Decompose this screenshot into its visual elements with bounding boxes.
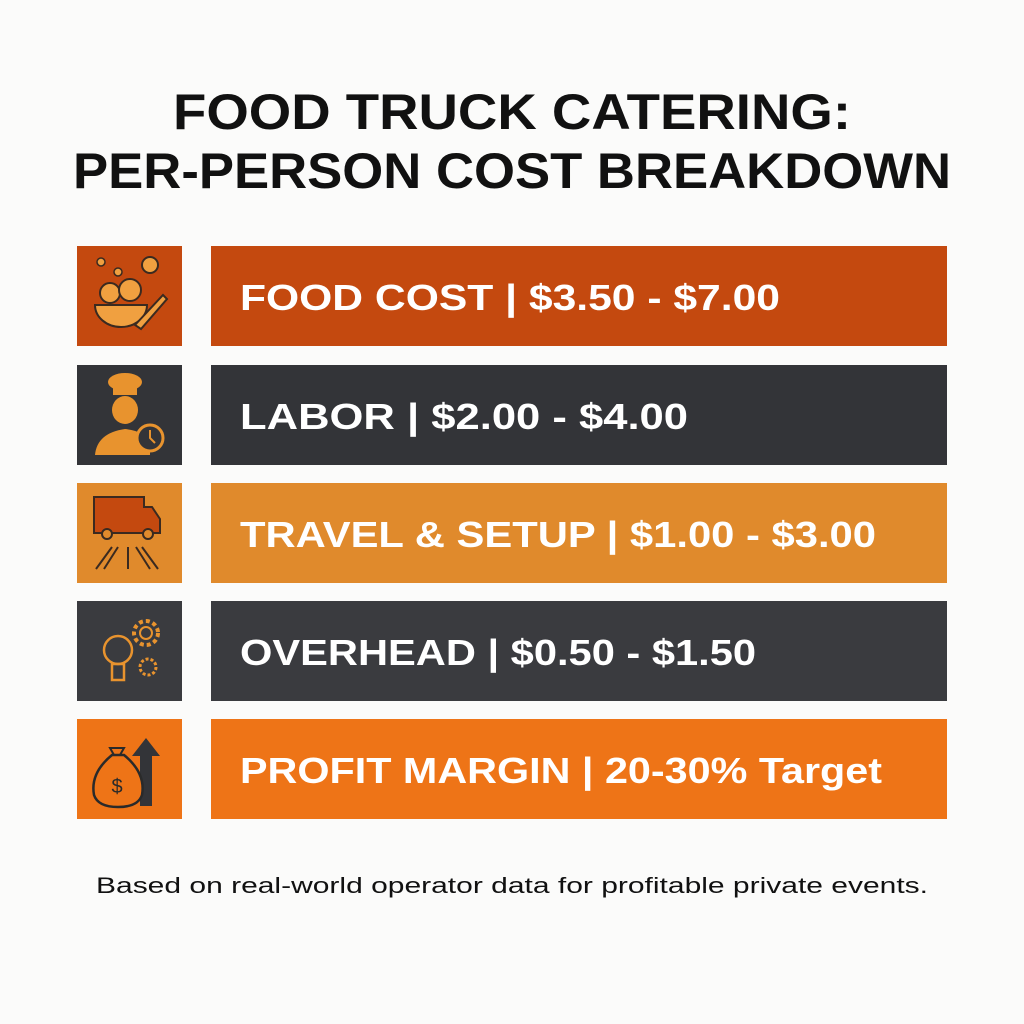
bar: labor: LABOR | $2.00 - $4.00 [240,396,688,438]
row: travel [77,483,947,583]
icon: money bag and arrow [77,719,182,819]
title: PER-PERSON COST BREAKDOWN [73,143,951,199]
row: overhead [77,601,947,701]
row: profit [77,719,947,819]
title: FOOD TRUCK CATERING: [173,84,851,140]
footer note: Based on real-world operator data for profitable private events. [96,873,928,898]
bar: overhead: OVERHEAD | $0.50 - $1.50 [240,632,756,674]
bar: labor [211,365,947,465]
bar: food cost [211,246,947,346]
icon: food bowl [77,246,182,346]
row: labor [77,365,947,465]
icon: bulb and gears [77,601,182,701]
icon: money bag and arrow: $ [111,776,123,798]
bar: profit: PROFIT MARGIN | 20-30% Target [240,750,882,792]
bar: travel: TRAVEL & SETUP | $1.00 - $3.00 [240,514,876,556]
bar: food cost: FOOD COST | $3.50 - $7.00 [240,277,780,319]
bar: travel [211,483,947,583]
row: food cost [77,246,947,346]
title [73,84,951,199]
bar: overhead [211,601,947,701]
bar: profit [211,719,947,819]
icon: food truck [77,483,182,583]
icon: chef with clock [77,365,182,465]
